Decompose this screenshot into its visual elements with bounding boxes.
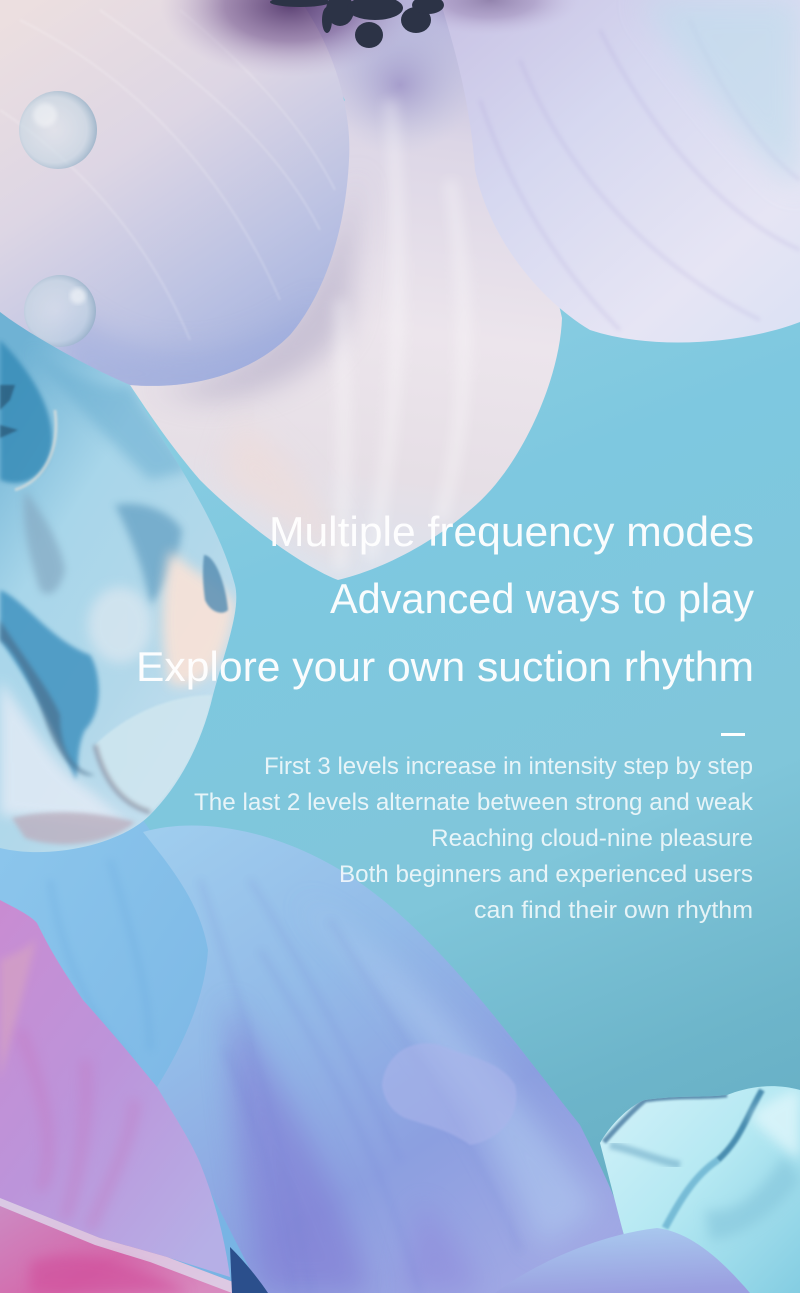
heading <box>136 508 754 690</box>
heading: Multiple frequency modes <box>269 508 754 555</box>
heading: Explore your own suction rhythm <box>136 643 754 690</box>
body text: First 3 levels increase in intensity step by step <box>264 753 753 780</box>
photo: flower petals top <box>0 0 800 580</box>
body text: Reaching cloud-nine pleasure <box>431 825 753 852</box>
flower centre shadow <box>160 0 420 77</box>
photo: water drops <box>19 91 97 347</box>
stamens <box>270 0 444 48</box>
divider dash <box>721 733 745 736</box>
body text: can find their own rhythm <box>474 897 753 924</box>
photo: lower flower petals <box>0 820 640 1293</box>
heading: Advanced ways to play <box>330 575 754 622</box>
drop on petal <box>382 1043 516 1145</box>
photo: ice cube <box>528 1086 800 1293</box>
photo: glass water gel <box>0 300 245 860</box>
body text <box>194 753 754 924</box>
body text: The last 2 levels alternate between strong and weak <box>194 789 754 816</box>
body text: Both beginners and experienced users <box>339 861 753 888</box>
